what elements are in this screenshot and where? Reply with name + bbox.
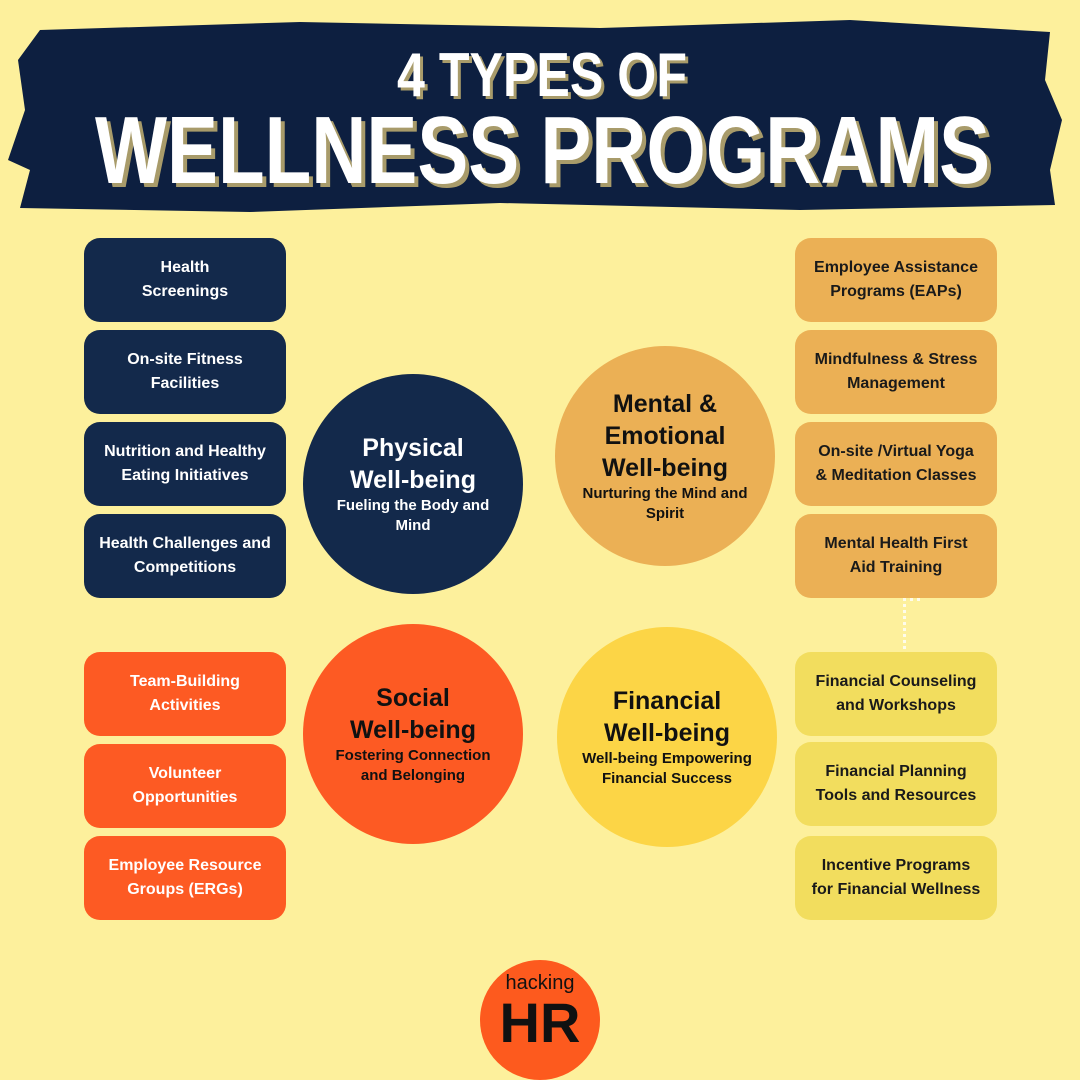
box: Aid Training [850, 559, 942, 576]
box: & Meditation Classes [816, 467, 976, 484]
circle: mental [555, 346, 775, 566]
box: for Financial Wellness [812, 881, 980, 898]
box [84, 836, 286, 920]
box: Mental Health First [824, 535, 968, 552]
box [795, 742, 997, 826]
panel: financial boxes [795, 652, 997, 920]
title line 1: 4 TYPES OF [397, 41, 687, 110]
circle: physical: Physical [362, 434, 464, 462]
box [795, 330, 997, 414]
box: Facilities [151, 375, 219, 392]
box [795, 422, 997, 506]
circle: social: Fostering Connection and Belonging [336, 747, 490, 784]
circle: mental: Emotional [605, 422, 725, 450]
box: Employee Resource Groups (ERGs) [109, 857, 261, 898]
circle: physical: Well-being [350, 466, 476, 494]
logo [480, 960, 600, 1080]
circle: physical [303, 374, 523, 594]
circle: social: Social [376, 684, 450, 712]
circle: financial: Financial [613, 687, 721, 715]
box: Health [161, 259, 209, 276]
panel: physical boxes [84, 238, 286, 598]
box: On-site /Virtual Yoga [818, 443, 974, 460]
box: On-site Fitness [127, 351, 243, 368]
title banner [8, 20, 1062, 212]
box [84, 238, 286, 322]
connector dotted [903, 598, 920, 655]
box: Screenings [142, 283, 228, 300]
box: Opportunities [133, 789, 237, 806]
box: Mindfulness & Stress Management [815, 351, 977, 392]
panel: mental boxes [795, 238, 997, 598]
box [84, 652, 286, 736]
box: Financial Planning Tools and Resources [816, 763, 976, 804]
box [795, 514, 997, 598]
logo: hacking [506, 972, 574, 994]
logo: HR [500, 991, 580, 1054]
circle: mental: Well-being [602, 454, 728, 482]
box [84, 330, 286, 414]
title line 1: 4 TYPES OF [400, 44, 690, 113]
box [84, 422, 286, 506]
circle: financial: Well-being [604, 719, 730, 747]
circle: mental: Mental & [613, 390, 717, 418]
box: Health Challenges and Competitions [99, 535, 271, 576]
box [795, 652, 997, 736]
circle: financial [557, 627, 777, 847]
circle: social [303, 624, 523, 844]
circle: social: Well-being [350, 716, 476, 744]
box: Financial Counseling and Workshops [816, 673, 976, 714]
box: Incentive Programs [822, 857, 970, 874]
box: Volunteer [149, 765, 221, 782]
circle: mental: Nurturing the Mind and Spirit [582, 485, 747, 522]
box [795, 836, 997, 920]
box [84, 744, 286, 828]
box [795, 238, 997, 322]
circle: physical: Fueling the Body and Mind [337, 497, 489, 534]
box: Activities [149, 697, 221, 714]
box: Nutrition and Healthy Eating Initiatives [104, 443, 266, 484]
box: Team-Building [130, 673, 240, 690]
circle: financial: Well-being Empowering Financial Success [582, 750, 752, 787]
box [84, 514, 286, 598]
panel: social boxes [84, 652, 286, 920]
box: Employee Assistance Programs (EAPs) [814, 259, 978, 300]
